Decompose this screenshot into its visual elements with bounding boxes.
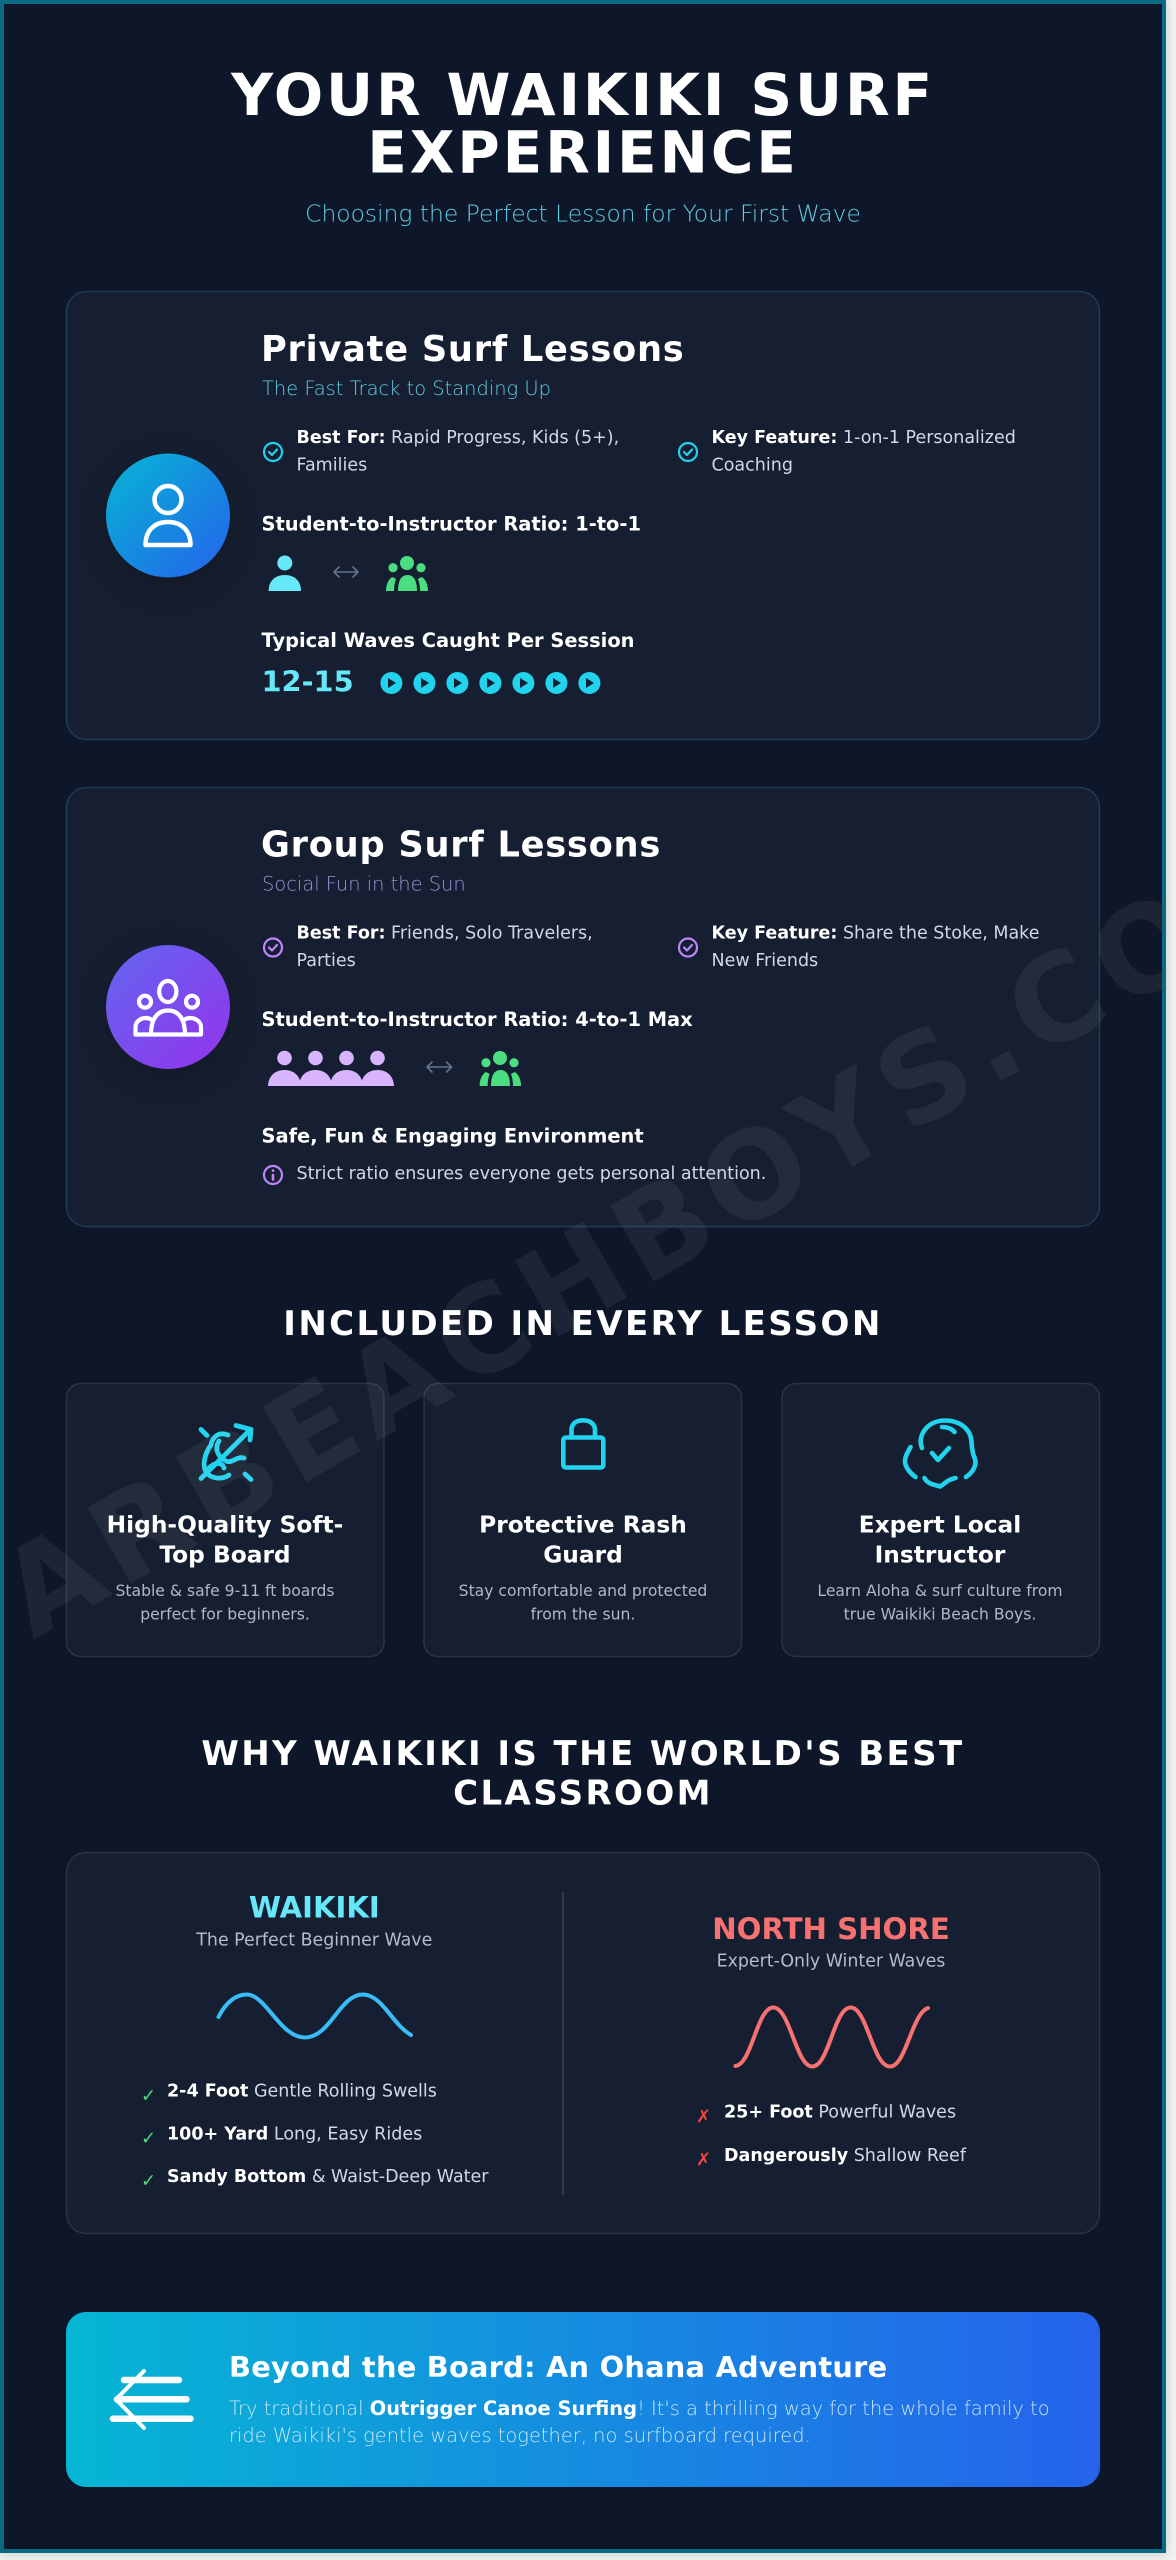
feature: best for	[264, 924, 593, 971]
title	[230, 61, 935, 187]
list: waikiki benefits	[141, 2082, 489, 2192]
ratio graphic	[268, 1051, 521, 1086]
wave: powerful	[736, 2008, 928, 2066]
title: EXPERIENCE	[367, 119, 799, 187]
list: waikiki benefits: ✓	[141, 2170, 156, 2192]
section heading: why waikiki: CLASSROOM	[453, 1774, 713, 1814]
list: waikiki benefits: ✓	[141, 2128, 156, 2149]
feature: best for	[264, 428, 619, 476]
waikiki column: The Perfect Beginner Wave	[195, 1931, 432, 1951]
icon: private lesson person	[106, 454, 230, 578]
list: north shore hazards	[696, 2103, 967, 2170]
list: waikiki benefits: 100+ Yard Long, Easy Rides	[167, 2124, 422, 2144]
list: waikiki benefits: ✓	[141, 2086, 156, 2106]
panel: soft-top board	[66, 1384, 384, 1656]
banner: ohana adventure	[66, 2312, 1100, 2487]
tagline: The Fast Track to Standing Up	[262, 377, 551, 400]
waves stat: 12-15	[262, 665, 354, 699]
wave: gentle	[218, 1994, 411, 2038]
environment note: Strict ratio ensures everyone gets personal attention.	[296, 1164, 766, 1184]
icon: outrigger canoe	[113, 2371, 190, 2428]
feature: key feature	[679, 428, 1016, 476]
panel: soft-top board: High-Quality Soft-	[107, 1512, 343, 1538]
panel: local instructor: Instructor	[875, 1542, 1006, 1569]
panel: wave comparison	[66, 1852, 1100, 2234]
panel: rash guard: Protective Rash	[479, 1512, 687, 1538]
environment heading: Safe, Fun & Engaging Environment	[262, 1125, 644, 1148]
heading: group surf lessons: Group Surf Lessons	[261, 825, 661, 866]
section heading: why waikiki	[201, 1734, 965, 1814]
panel: local instructor: true Waikiki Beach Boys.	[844, 1605, 1036, 1623]
list: north shore hazards: ✗	[696, 2150, 711, 2170]
icon: lock	[563, 1420, 603, 1468]
panel: private surf lessons	[66, 292, 1100, 740]
panel: local instructor	[782, 1384, 1100, 1656]
list: waikiki benefits: Sandy Bottom & Waist-Deep Water	[167, 2167, 489, 2187]
north shore column: NORTH SHORE	[712, 1912, 950, 1946]
ratio heading: Student-to-Instructor Ratio: 1-to-1	[262, 513, 641, 536]
ratio heading: Student-to-Instructor Ratio: 4-to-1 Max	[262, 1008, 693, 1031]
title: YOUR WAIKIKI SURF	[230, 61, 935, 129]
list: north shore hazards: Dangerously Shallow Reef	[724, 2146, 967, 2166]
tagline: Social Fun in the Sun	[262, 873, 466, 896]
panel: rash guard: Guard	[543, 1542, 623, 1569]
panel: rash guard	[424, 1384, 742, 1656]
panel: local instructor: Expert Local	[859, 1512, 1021, 1538]
banner: ohana adventure: ride Waikiki's gentle waves together, no surfboard required.	[229, 2424, 811, 2447]
banner: ohana adventure: Try traditional Outrigger Canoe Surfing! It's a thrilling way for the whole family to	[229, 2397, 1050, 2420]
waikiki column: WAIKIKI	[249, 1891, 380, 1925]
north shore column: Expert-Only Winter Waves	[717, 1952, 945, 1972]
feature: best for: Best For: Friends, Solo Travelers,	[296, 924, 593, 944]
feature: best for: Families	[296, 456, 367, 476]
panel: rash guard: from the sun.	[531, 1605, 635, 1623]
list: north shore hazards: 25+ Foot Powerful Waves	[724, 2103, 956, 2123]
heading: private surf lessons: Private Surf Lessons	[261, 329, 684, 370]
section heading: why waikiki: WHY WAIKIKI IS THE WORLD'S BEST	[201, 1734, 965, 1774]
panel: rash guard: Stay comfortable and protected	[459, 1582, 707, 1600]
list: waikiki benefits: 2-4 Foot Gentle Rolling Swells	[167, 2082, 437, 2102]
panel: soft-top board: perfect for beginners.	[140, 1605, 310, 1623]
waikiki column	[141, 1891, 489, 2192]
feature: key feature	[679, 924, 1039, 971]
feature: key feature: Coaching	[712, 456, 793, 476]
panel: group surf lessons	[66, 788, 1100, 1226]
panel: soft-top board: Stable & safe 9-11 ft boards	[116, 1582, 334, 1600]
icon: instructor	[905, 1420, 975, 1486]
feature: key feature: New Friends	[712, 951, 818, 971]
feature: key feature: Key Feature: 1-on-1 Personalized	[712, 428, 1016, 448]
ratio graphic	[269, 556, 428, 591]
wave play icons	[380, 672, 600, 694]
icon: group lesson people	[106, 945, 230, 1069]
banner: ohana adventure: Beyond the Board: An Ohana Adventure	[229, 2350, 887, 2384]
north shore column	[696, 1912, 967, 2170]
feature: best for: Parties	[296, 951, 356, 971]
panel: local instructor: Learn Aloha & surf culture from	[817, 1582, 1063, 1600]
divider	[562, 1892, 564, 2195]
panel: soft-top board: Top Board	[159, 1542, 291, 1569]
section heading: included: INCLUDED IN EVERY LESSON	[283, 1304, 883, 1344]
waves heading: Typical Waves Caught Per Session	[262, 629, 635, 652]
feature: key feature: Key Feature: Share the Stoke, Make	[712, 924, 1039, 944]
list: north shore hazards: ✗	[696, 2106, 711, 2128]
subtitle: Choosing the Perfect Lesson for Your First Wave	[305, 200, 861, 228]
icon: surfboard	[201, 1426, 251, 1480]
feature: best for: Best For: Rapid Progress, Kids (5+),	[296, 428, 619, 448]
